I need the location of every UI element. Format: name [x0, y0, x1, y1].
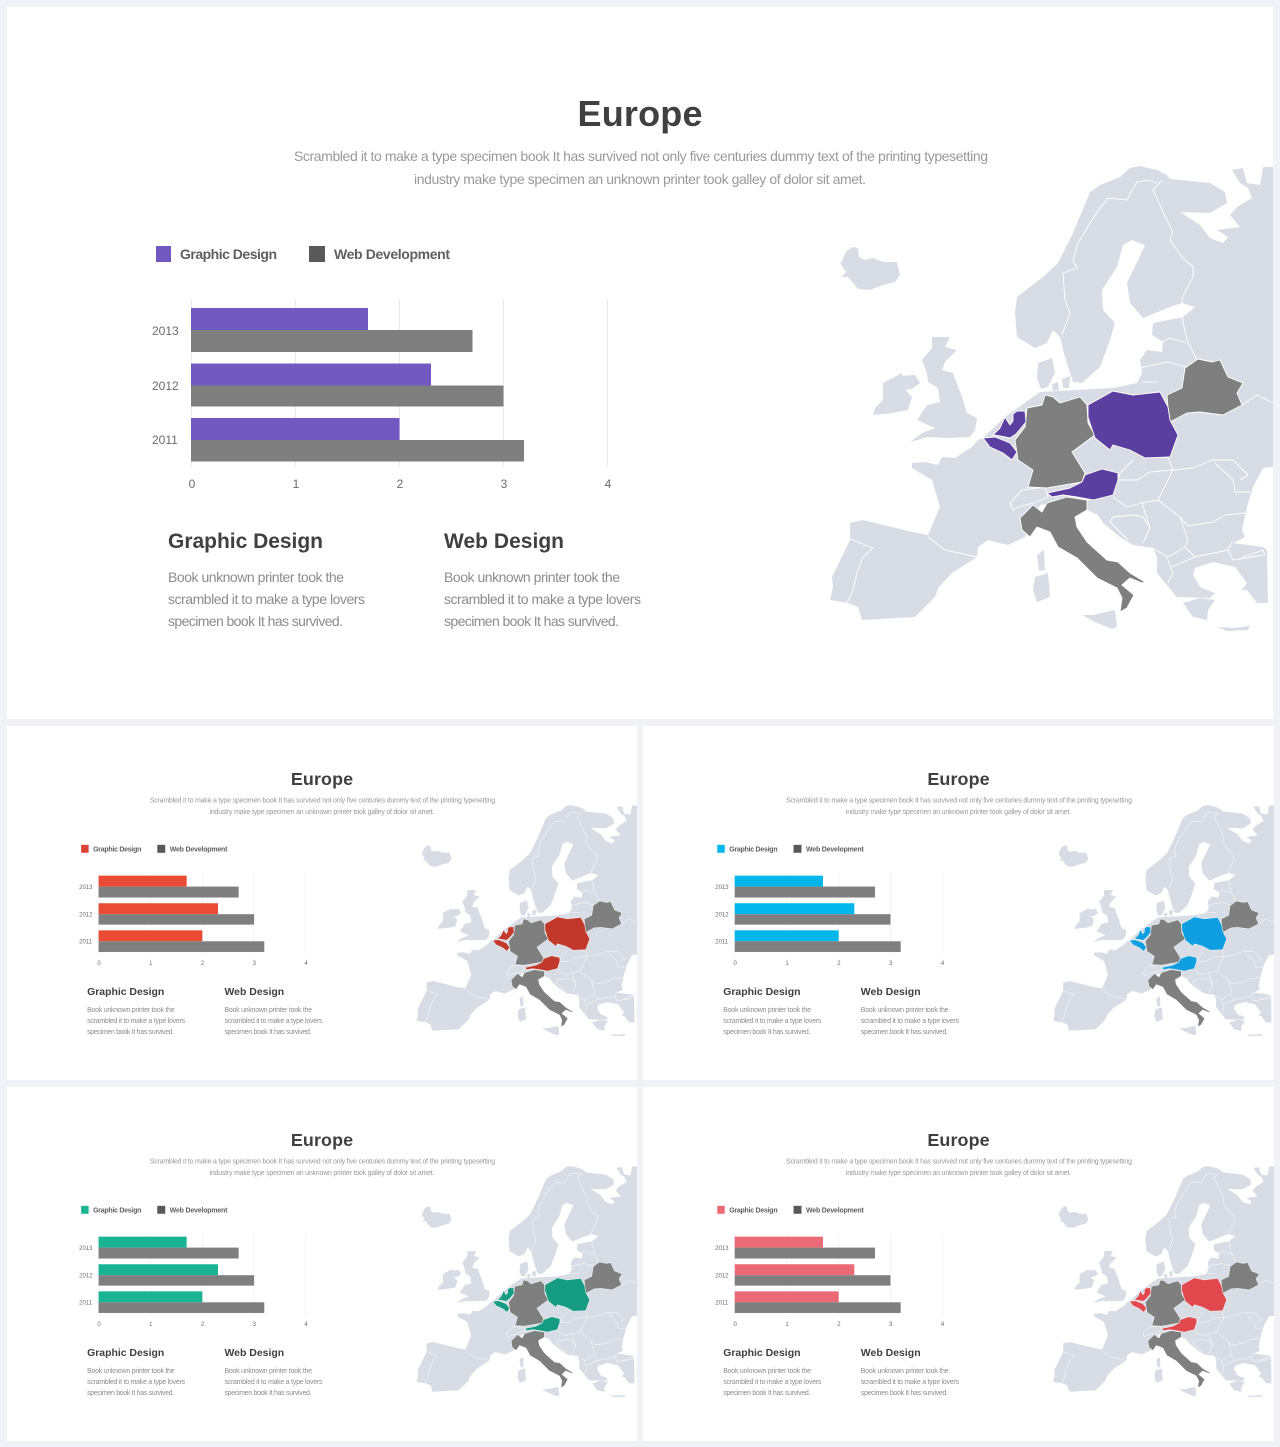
text block: graphic design — [87, 987, 186, 1036]
text block: graphic design: Graphic Design — [87, 1348, 164, 1359]
text block: graphic design: Book unknown printer took the — [87, 1368, 175, 1375]
text block: graphic design: Book unknown printer took the — [723, 1368, 811, 1375]
bar chart: 3 — [253, 961, 257, 967]
subtitle: industry make type specimen an unknown printer took galley of dolor sit amet. — [846, 1170, 1071, 1177]
subtitle: Scrambled it to make a type specimen book It has survived not only five centuries dummy text of the printing typesetting — [786, 1159, 1132, 1166]
map: europe pink — [1053, 1166, 1274, 1397]
text block: graphic design: scrambled it to make a type lovers — [168, 591, 365, 607]
text block: web design: scrambled it to make a type lovers — [444, 591, 641, 607]
text block: graphic design: specimen book It has survived. — [87, 1029, 174, 1036]
text block: web design: specimen book It has survived. — [861, 1029, 948, 1036]
subtitle: Scrambled it to make a type specimen book It has survived not only five centuries dummy text of the printing typesetting — [294, 148, 988, 164]
map: europe purple — [830, 166, 1273, 631]
subtitle: industry make type specimen an unknown printer took galley of dolor sit amet. — [210, 809, 435, 816]
legend: Graphic Design — [93, 846, 141, 853]
bar chart: 2012 — [715, 912, 729, 918]
title: Europe — [291, 769, 353, 789]
title: Europe — [291, 1130, 353, 1150]
map: europe blue — [1053, 805, 1274, 1036]
bar chart: 2 — [397, 477, 404, 491]
bar chart: 4 — [605, 477, 612, 491]
subtitle: Scrambled it to make a type specimen book It has survived not only five centuries dummy text of the printing typesetting — [150, 798, 495, 805]
text block: web design: Web Design — [224, 1348, 284, 1359]
text block: graphic design: specimen book It has survived. — [87, 1390, 174, 1397]
text block: web design: Book unknown printer took the — [861, 1007, 949, 1014]
text block: web design: Web Design — [861, 1348, 921, 1359]
text block: web design: Book unknown printer took the — [444, 569, 620, 585]
subtitle: industry make type specimen an unknown printer took galley of dolor sit amet. — [846, 809, 1071, 816]
title: Europe — [927, 1130, 990, 1150]
panel: pink slide — [643, 1087, 1274, 1441]
bar chart: 2011 — [715, 939, 729, 945]
bar chart: 2 — [201, 961, 205, 967]
legend: Graphic Design — [729, 846, 778, 853]
bar chart — [715, 1233, 945, 1328]
map: europe green — [417, 1166, 637, 1397]
bar chart: 2 — [837, 961, 841, 967]
legend — [81, 1206, 228, 1214]
text block: web design: Book unknown printer took the — [224, 1007, 312, 1014]
bar chart: 3 — [501, 477, 508, 491]
subtitle — [294, 148, 988, 187]
map: europe red — [417, 805, 637, 1036]
panel: large purple slide — [7, 7, 1273, 719]
bar chart: 1 — [149, 961, 153, 967]
bar chart — [715, 872, 945, 967]
text block: web design: Book unknown printer took the — [224, 1368, 312, 1375]
text block: graphic design: Book unknown printer took the — [87, 1007, 175, 1014]
bar chart — [79, 1233, 308, 1328]
bar chart: 2012 — [79, 1273, 93, 1279]
text block: graphic design: scrambled it to make a type lovers — [87, 1018, 186, 1025]
subtitle — [786, 798, 1132, 816]
bar chart: 2011 — [79, 1300, 93, 1306]
text block: web design: specimen book It has survived. — [224, 1029, 312, 1036]
text block: web design: specimen book It has survived. — [224, 1390, 312, 1397]
bar chart: 2013 — [715, 1246, 729, 1252]
bar chart: 2012 — [152, 379, 179, 393]
bar chart: 1 — [785, 1322, 789, 1328]
subtitle — [150, 1159, 495, 1177]
legend: Graphic Design — [180, 246, 277, 262]
legend: Web Development — [806, 1207, 864, 1214]
title: Europe — [578, 93, 702, 134]
bar chart: 2011 — [79, 939, 93, 945]
text block: web design: scrambled it to make a type lovers — [861, 1379, 960, 1386]
bar chart: 3 — [889, 961, 893, 967]
bar chart: 3 — [253, 1322, 257, 1328]
text block: web design: scrambled it to make a type lovers — [861, 1018, 960, 1025]
bar chart: 2012 — [79, 912, 93, 918]
bar chart: 2011 — [152, 433, 178, 447]
text block: web design — [224, 987, 323, 1036]
bar chart: 1 — [293, 477, 300, 491]
text block: graphic design: scrambled it to make a type lovers — [87, 1379, 186, 1386]
bar chart: 4 — [304, 1322, 308, 1328]
bar chart: 0 — [734, 961, 738, 967]
text block: web design — [224, 1348, 323, 1397]
bar chart: 2 — [201, 1322, 205, 1328]
subtitle — [150, 798, 495, 816]
text block: graphic design: specimen book It has survived. — [168, 613, 343, 629]
text block: graphic design: Graphic Design — [723, 987, 801, 998]
text block: web design — [861, 1348, 960, 1397]
subtitle — [786, 1159, 1132, 1177]
bar chart: 2012 — [715, 1273, 729, 1279]
text block: graphic design: scrambled it to make a type lovers — [723, 1018, 822, 1025]
bar chart: 0 — [97, 961, 101, 967]
bar chart: 2013 — [152, 324, 179, 338]
bar chart: 2011 — [715, 1300, 729, 1306]
bar chart: 2013 — [79, 1246, 93, 1252]
legend: Graphic Design — [93, 1207, 141, 1214]
bar chart: 0 — [734, 1322, 738, 1328]
subtitle: industry make type specimen an unknown printer took galley of dolor sit amet. — [210, 1170, 435, 1177]
text block: graphic design: scrambled it to make a type lovers — [723, 1379, 822, 1386]
text block: graphic design — [87, 1348, 186, 1397]
subtitle: Scrambled it to make a type specimen book It has survived not only five centuries dummy text of the printing typesetting — [786, 798, 1132, 805]
bar chart — [79, 872, 308, 967]
legend: Graphic Design — [729, 1207, 778, 1214]
legend — [156, 246, 450, 262]
text block: web design — [861, 987, 960, 1036]
subtitle: industry make type specimen an unknown printer took galley of dolor sit amet. — [414, 171, 866, 187]
text block: web design: scrambled it to make a type lovers — [224, 1379, 323, 1386]
text block: graphic design — [723, 1348, 822, 1397]
text block: web design: scrambled it to make a type lovers — [224, 1018, 323, 1025]
panel: green slide — [7, 1087, 637, 1441]
text block: graphic design: Book unknown printer took the — [168, 569, 344, 585]
text block: web design: specimen book It has survived. — [444, 613, 619, 629]
legend — [717, 845, 864, 853]
text block: graphic design: Book unknown printer took the — [723, 1007, 811, 1014]
text block: web design: Book unknown printer took the — [861, 1368, 949, 1375]
panel: red slide — [7, 726, 637, 1080]
legend: Web Development — [806, 846, 864, 853]
legend — [81, 845, 228, 853]
bar chart: 2013 — [715, 885, 729, 891]
text block: graphic design — [723, 987, 822, 1036]
legend: Web Development — [334, 246, 450, 262]
text block: web design: Web Design — [861, 987, 921, 998]
bar chart: 0 — [97, 1322, 101, 1328]
text block: graphic design: Graphic Design — [168, 530, 323, 553]
text block: graphic design — [168, 530, 365, 629]
legend: Web Development — [170, 1207, 228, 1214]
text block: web design: Web Design — [224, 987, 284, 998]
bar chart: 1 — [785, 961, 789, 967]
bar chart: 2 — [837, 1322, 841, 1328]
legend: Web Development — [170, 846, 228, 853]
bar chart: 4 — [304, 961, 308, 967]
bar chart: 4 — [941, 1322, 945, 1328]
text block: graphic design: specimen book It has survived. — [723, 1390, 811, 1397]
subtitle: Scrambled it to make a type specimen book It has survived not only five centuries dummy text of the printing typesetting — [150, 1159, 495, 1166]
legend — [717, 1206, 864, 1214]
bar chart — [152, 300, 612, 491]
panel: blue slide — [643, 726, 1274, 1080]
text block: graphic design: Graphic Design — [723, 1348, 801, 1359]
text block: graphic design: Graphic Design — [87, 987, 164, 998]
bar chart: 3 — [889, 1322, 893, 1328]
title: Europe — [927, 769, 990, 789]
text block: web design: specimen book It has survived. — [861, 1390, 948, 1397]
text block: web design: Web Design — [444, 530, 564, 553]
bar chart: 0 — [189, 477, 196, 491]
text block: graphic design: specimen book It has survived. — [723, 1029, 811, 1036]
bar chart: 4 — [941, 961, 945, 967]
bar chart: 1 — [149, 1322, 153, 1328]
bar chart: 2013 — [79, 885, 93, 891]
text block: web design — [444, 530, 641, 629]
